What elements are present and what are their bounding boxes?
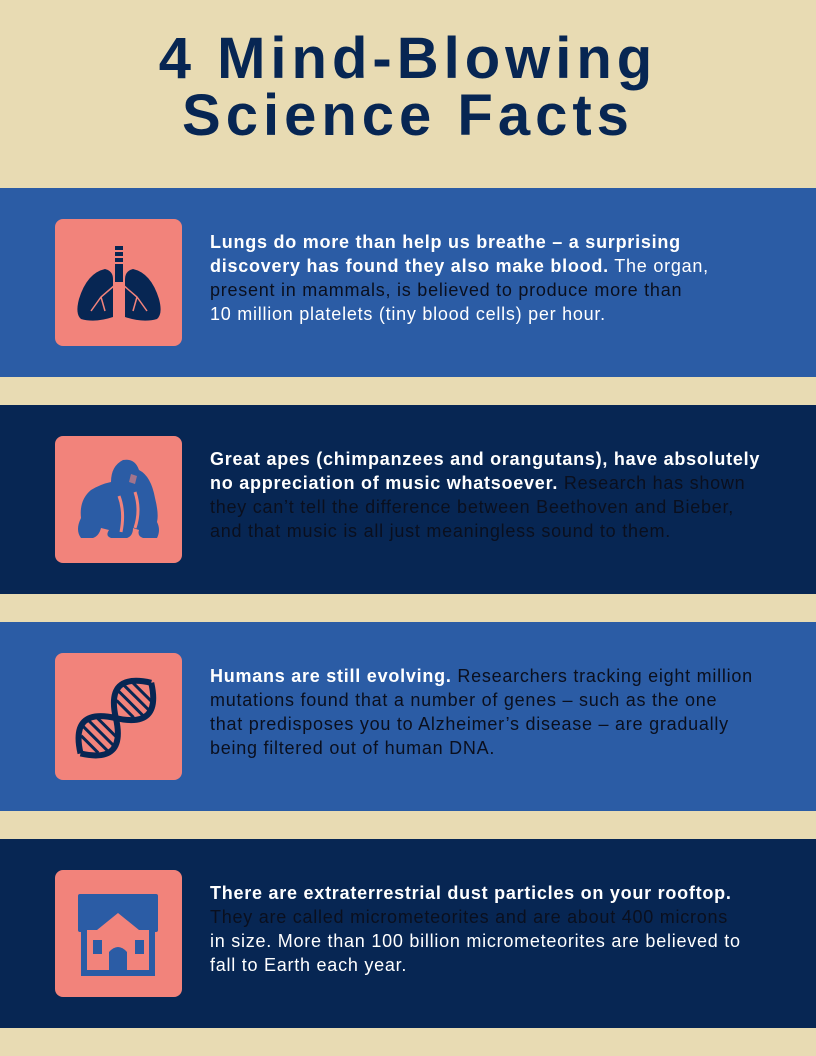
text: they can’t tell the difference between Beethoven and Bieber, [210, 497, 734, 517]
text: They are called micrometeorites and are about 400 microns [210, 907, 728, 927]
icon: house [55, 870, 182, 997]
text: no appreciation of music whatsoever. Research has shown [210, 473, 745, 493]
text: Humans are still evolving. Researchers tracking eight million [210, 666, 753, 686]
text: in size. More than 100 billion micrometeorites are believed to [210, 931, 741, 951]
text: There are extraterrestrial dust particles on your rooftop. [210, 883, 732, 903]
text: 10 million platelets (tiny blood cells) per hour. [210, 304, 606, 324]
panel: lungs [0, 188, 816, 377]
icon: lungs [55, 219, 182, 346]
title: Science Facts [182, 83, 634, 148]
text: Great apes (chimpanzees and orangutans), have absolutely [210, 449, 760, 469]
text [210, 449, 760, 541]
text: that predisposes you to Alzheimer’s disease – are gradually [210, 714, 729, 734]
panel: dust [0, 839, 816, 1028]
title [159, 26, 657, 148]
icon: gorilla [55, 436, 182, 563]
panel: evolving [0, 622, 816, 811]
text: Lungs do more than help us breathe – a surprising [210, 232, 681, 252]
icon: dna [55, 653, 182, 780]
text [210, 883, 741, 975]
text: present in mammals, is believed to produce more than [210, 280, 682, 300]
text: mutations found that a number of genes – such as the one [210, 690, 717, 710]
text: and that music is all just meaningless sound to them. [210, 521, 671, 541]
title: 4 Mind-Blowing [159, 26, 657, 91]
text [210, 232, 709, 324]
text: discovery has found they also make blood. The organ, [210, 256, 709, 276]
panel: apes [0, 405, 816, 594]
text: being filtered out of human DNA. [210, 738, 495, 758]
text: fall to Earth each year. [210, 955, 407, 975]
text [210, 666, 753, 758]
